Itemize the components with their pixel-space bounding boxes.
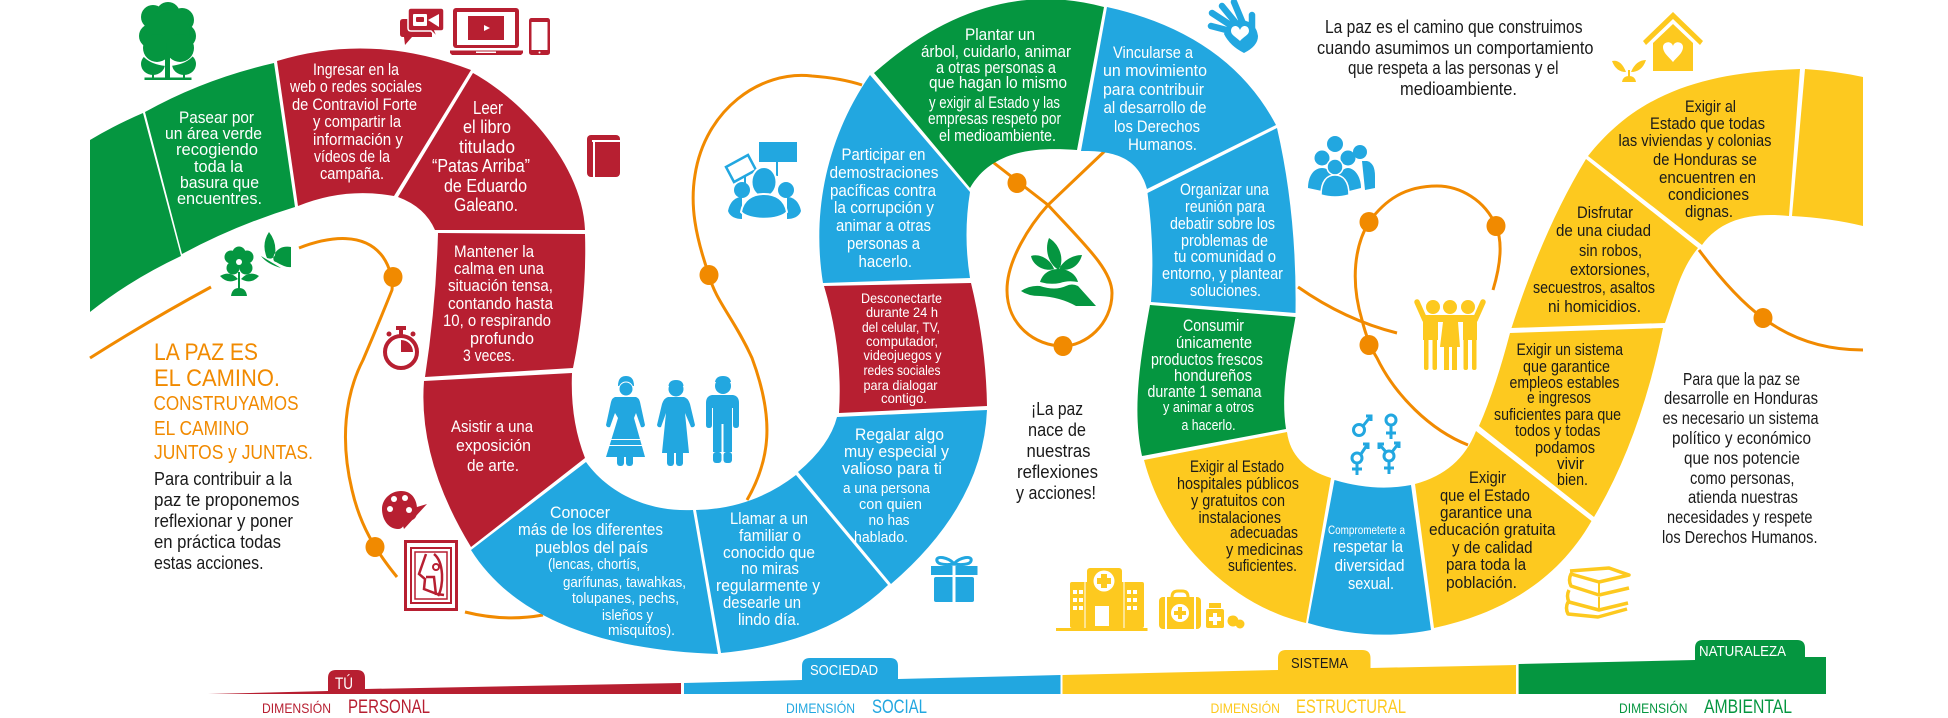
icon: tree (137, 2, 199, 80)
text block: la paz es el camino (1317, 17, 1594, 99)
panel: pasear: encuentres. (177, 190, 262, 208)
panel: exigir hospitales: hospitales públicos (1177, 475, 1299, 493)
label: dimensión estructural: DIMENSIÓN (1210, 700, 1280, 716)
panel: mantener: situación tensa, (448, 277, 553, 295)
title (154, 339, 313, 464)
panel: ingresar: y compartir la (313, 113, 402, 131)
panel: vincularse: Humanos. (1128, 136, 1197, 154)
panel: exigir viviendas: condiciones (1668, 186, 1749, 204)
bar: estructural: SISTEMA (1291, 655, 1348, 672)
panel: conocer: más de los diferentes (518, 521, 663, 539)
panel: pasear: toda la (194, 158, 244, 176)
panel: disfrutar: de una ciudad (1556, 222, 1651, 240)
text block: intro: Para contribuir a la (154, 469, 293, 489)
label: dimensión ambiental (1619, 697, 1792, 718)
panel: regalar: hablado. (854, 529, 908, 546)
panel: exigir sistema de empleo: podamos (1535, 439, 1595, 457)
panel: consumir: productos frescos (1151, 351, 1263, 369)
text block: intro: en práctica todas (154, 532, 281, 552)
text block: intro: estas acciones. (154, 553, 264, 573)
panel: conocer (471, 462, 718, 654)
text block: intro (154, 469, 300, 573)
panel: consumir: y animar a otros (1163, 399, 1254, 416)
panel: organizar (1148, 128, 1296, 313)
text block: para que la paz: es necesario un sistema (1662, 408, 1819, 428)
panel: ingresar: vídeos de la (314, 148, 391, 166)
bar: ambiental (1519, 640, 1826, 694)
panel: plantar: árbol, cuidarlo, animar (921, 43, 1071, 61)
label: dimensión social: SOCIAL (872, 697, 927, 718)
panel: exigir sistema de empleo: suficientes para que (1494, 406, 1621, 424)
label: dimensión personal: PERSONAL (348, 697, 430, 718)
text block: para que la paz: desarrolle en Honduras (1664, 388, 1818, 408)
panel: participar (819, 75, 970, 283)
panel: disfrutar (1512, 159, 1698, 328)
panel: plantar: y exigir al Estado y las (929, 94, 1060, 112)
text block: la paz es el camino: que respeta a las personas y el (1348, 58, 1558, 78)
panel: disfrutar: extorsiones, (1570, 261, 1650, 279)
icon: phone (529, 18, 550, 55)
panel: exigir viviendas: encuentren en (1659, 169, 1756, 187)
panel: asistir: Asistir a una (451, 418, 534, 436)
panel: disfrutar: ni homicidios. (1548, 298, 1641, 316)
panel: disfrutar: secuestros, asaltos (1533, 279, 1655, 297)
icon: gender symbols (1352, 415, 1399, 475)
panel: organizar: soluciones. (1190, 282, 1261, 300)
panel: exigir sistema de empleo: Exigir un sistema (1516, 341, 1624, 359)
label: dimensión estructural (1210, 697, 1406, 718)
panel: asistir (423, 373, 585, 547)
icon: woman in dress (606, 376, 645, 466)
panel: mantener: Mantener la (454, 243, 535, 261)
orange path line: left section (90, 239, 543, 618)
text block: para que la paz: Para que la paz se (1683, 369, 1800, 389)
panel: organizar: problemas de (1181, 232, 1268, 250)
panel: exigir sistema de empleo: vivir (1557, 455, 1584, 473)
icon: house with heart (1643, 12, 1703, 71)
panel: disfrutar: Disfrutar (1577, 204, 1633, 222)
panel: exigir educación: educación gratuita (1429, 521, 1556, 539)
panel: desconectarte: para dialogar (864, 377, 938, 393)
orange path line: protest loop (693, 75, 862, 500)
panel: llamar: Llamar a un (730, 510, 808, 528)
panel: exigir viviendas: las viviendas y colonias (1618, 132, 1772, 150)
icon: pill bottle (1206, 603, 1224, 628)
panel: exigir educación (1415, 431, 1592, 628)
text block: la paz nace: nuestras (1026, 441, 1090, 461)
panel: comprometerte: respetar la (1333, 538, 1404, 556)
panel: exigir viviendas: Estado que todas (1650, 115, 1765, 133)
panel: participar: demostraciones (830, 164, 938, 182)
icon: video chat (400, 8, 444, 45)
icon: flower (220, 246, 259, 296)
text block: la paz es el camino: La paz es el camino que construimos (1325, 17, 1582, 37)
panel: vincularse: un movimiento (1103, 62, 1207, 80)
panel: regalar: con quien (859, 496, 922, 513)
text block: para que la paz: necesidades y respete (1667, 507, 1812, 527)
panel: leer: el libro (463, 117, 511, 137)
panel: llamar: lindo día. (738, 611, 800, 629)
icon: framed painting (406, 542, 456, 610)
panel: desconectarte: Desconectarte (861, 290, 942, 306)
panel: pasear: recogiendo (176, 141, 258, 159)
panel: comprometerte (1308, 480, 1431, 635)
text block: para que la paz: como personas, (1690, 468, 1794, 488)
panel: plantar: el medioambiente. (939, 127, 1056, 145)
panel: consumir: únicamente (1176, 334, 1252, 352)
panel: exigir educación: Exigir (1469, 469, 1506, 487)
panel: desconectarte: contigo. (881, 390, 927, 406)
panel: regalar: a una persona (843, 480, 931, 497)
title: CONSTRUYAMOS (154, 393, 298, 415)
panel: vincularse: al desarrollo de (1104, 99, 1206, 117)
icon: family (1417, 300, 1483, 370)
panel: exigir educación: garantice una (1440, 504, 1533, 522)
panel: desconectarte (824, 283, 987, 413)
panel: exigir hospitales (1144, 432, 1331, 623)
panel: pasear: un área verde (165, 125, 262, 143)
text block: intro: reflexionar y poner (154, 511, 293, 531)
bar: estructural (1062, 650, 1516, 694)
panel: consumir: hondureños (1174, 367, 1252, 385)
panel: conocer: misquitos). (608, 622, 675, 639)
text block: para que la paz (1662, 369, 1819, 547)
title: LA PAZ ES (154, 339, 258, 366)
panel: participar: la corrupción y (834, 199, 935, 217)
title: EL CAMINO. (154, 365, 280, 392)
panel: regalar: no has (868, 512, 910, 529)
panel: pasear (145, 63, 295, 254)
panel: comprometerte: sexual. (1348, 575, 1394, 593)
panel: exigir viviendas (1588, 69, 1800, 245)
title: EL CAMINO (154, 418, 249, 440)
icon: laptop (450, 8, 523, 55)
icon: butterfly (261, 232, 291, 268)
panel: desconectarte: redes sociales (864, 362, 940, 378)
panel: ingresar: de Contraviol Forte (292, 96, 417, 114)
text block: la paz es el camino: medioambiente. (1400, 79, 1517, 99)
panel: mantener: 10, o respirando (443, 312, 551, 330)
text block: la paz nace: ¡La paz (1031, 399, 1083, 419)
bar: social: SOCIEDAD (810, 662, 878, 679)
panel: vincularse: los Derechos (1114, 118, 1200, 136)
panel: ingresar: web o redes sociales (289, 78, 422, 96)
panel: desconectarte: durante 24 h (866, 304, 938, 320)
panel: exigir educación: población. (1446, 574, 1517, 592)
panel: conocer: (lencas, chortís, (548, 556, 640, 573)
icon: stopwatch (385, 326, 417, 368)
panel: comprometerte: diversidad (1334, 557, 1404, 575)
text block: para que la paz: atienda nuestras (1688, 487, 1798, 507)
icon: palette (382, 491, 427, 529)
panel: ingresar: campaña. (320, 165, 384, 183)
text block: la paz nace: reflexiones (1017, 462, 1098, 482)
panel: exigir sistema de empleo: empleos estables (1510, 374, 1620, 392)
panel: llamar: no miras (741, 560, 799, 578)
panel: pasear: Pasear por (179, 109, 254, 127)
panel: exigir viviendas: Exigir al (1685, 98, 1736, 116)
panel: regalar: muy especial y (844, 443, 950, 461)
icon: books (1566, 568, 1629, 617)
bar: personal (208, 670, 681, 694)
panel: leer: “Patas Arriba” (432, 156, 530, 176)
text block: la paz nace: nace de (1028, 420, 1086, 440)
label: dimensión personal: DIMENSIÓN (262, 700, 331, 716)
panel: desconectarte: computador, (866, 333, 938, 349)
label: dimensión personal (262, 697, 430, 718)
panel: desconectarte: del celular, TV, (862, 319, 940, 335)
bar: social (684, 658, 1060, 694)
panel: mantener: 3 veces. (463, 347, 515, 365)
text block: intro: paz te proponemos (154, 490, 300, 510)
icon: first aid kit (1159, 591, 1201, 629)
panel: exigir educación: para toda la (1446, 556, 1527, 574)
icon: gift box (931, 557, 978, 602)
icon: protest group (726, 142, 801, 219)
panel: regalar: valioso para ti (842, 460, 942, 478)
panel: mantener: profundo (470, 330, 534, 348)
panel: participar: personas a (847, 235, 921, 253)
panel: vincularse: Vincularse a (1113, 44, 1194, 62)
panel: conocer: Conocer (550, 504, 610, 522)
panel: mantener: contando hasta (448, 295, 554, 313)
icon: pills (1228, 616, 1244, 628)
panel: plantar: Plantar un (965, 26, 1035, 44)
panel: leer (398, 73, 585, 230)
panel: organizar: entorno, y plantear (1162, 265, 1283, 283)
panel: disfrutar: sin robos, (1579, 242, 1642, 260)
panel: green start segment (90, 113, 181, 312)
panel: consumir: durante 1 semana (1148, 383, 1262, 401)
panel: exigir sistema de empleo (1479, 328, 1663, 517)
text block: para que la paz: que nos potencie (1684, 448, 1800, 468)
panel: exigir hospitales: suficientes. (1228, 557, 1297, 575)
text block: para que la paz: los Derechos Humanos. (1662, 527, 1818, 547)
panel: exigir sistema de empleo: que garantice (1523, 358, 1610, 376)
title: JUNTOS y JUNTAS. (154, 442, 313, 464)
panel: mantener (425, 233, 585, 377)
icon: plant in hand (1021, 238, 1096, 306)
panel: conocer: pueblos del país (535, 539, 648, 557)
panel: pasear: basura que (180, 174, 259, 192)
icon: hand with heart (1211, 2, 1258, 53)
panel: exigir hospitales: Exigir al Estado (1190, 458, 1284, 476)
panel: ingresar (277, 48, 471, 206)
panel: exigir educación: y de calidad (1452, 539, 1532, 557)
panel: llamar: regularmente y (716, 577, 821, 595)
panel: ingresar: información y (313, 131, 404, 149)
panel: exigir sistema de empleo: bien. (1557, 471, 1588, 489)
panel: mantener: calma en una (454, 260, 545, 278)
bar: personal: TÚ (335, 674, 353, 693)
panel: conocer: tolupanes, pechs, (572, 590, 679, 607)
panel: exigir viviendas: de Honduras se (1653, 151, 1757, 169)
panel: participar: Participar en (842, 146, 926, 164)
label: dimensión ambiental: DIMENSIÓN (1619, 700, 1688, 716)
panel: exigir sistema de empleo: todos y todas (1515, 422, 1600, 440)
panel: exigir viviendas: dignas. (1685, 203, 1733, 221)
orange path line: centre loop (985, 148, 1112, 356)
panel: exigir sistema de empleo: e ingresos (1527, 389, 1591, 407)
panel: asistir: exposición (456, 437, 531, 455)
panel: vincularse: para contribuir (1103, 81, 1204, 99)
panel: desconectarte: videojuegos y (864, 347, 942, 363)
text block: la paz nace: y acciones! (1016, 483, 1096, 503)
panel: exigir hospitales: y medicinas (1226, 541, 1303, 559)
panel: ingresar: Ingresar en la (313, 61, 400, 79)
panel: llamar: conocido que (723, 544, 815, 562)
panel: conocer: garífunas, tawahkas, (563, 574, 686, 591)
orange path line: right loop (1298, 186, 1506, 445)
icon: woman in coat (657, 380, 695, 466)
panel: organizar: debatir sobre los (1170, 215, 1275, 233)
text block: para que la paz: político y económico (1672, 428, 1811, 448)
icon: man (706, 376, 739, 463)
panel: consumir: a hacerlo. (1182, 417, 1236, 434)
panel: organizar: reunión para (1185, 198, 1266, 216)
panel: llamar (696, 475, 888, 653)
panel: leer: de Eduardo (444, 176, 527, 196)
orange path line: far right (1699, 250, 1863, 350)
panel: vincularse (1081, 7, 1276, 189)
panel: llamar: desearle un (723, 594, 801, 612)
panel: comprometerte: Comprometerte a (1328, 525, 1406, 537)
icon: people group (1308, 136, 1375, 197)
label: dimensión estructural: ESTRUCTURAL (1296, 697, 1406, 718)
panel: plantar: a otras personas a (936, 59, 1057, 77)
panel: consumir (1137, 305, 1296, 456)
panel: consumir: Consumir (1183, 317, 1244, 335)
bar: ambiental: NATURALEZA (1699, 643, 1786, 660)
panel: regalar (798, 410, 987, 584)
panel: exigir hospitales: adecuadas (1230, 524, 1298, 542)
panel: llamar: familiar o (739, 527, 801, 545)
panel: conocer: isleños y (602, 607, 653, 624)
panel: plantar (874, 0, 1104, 188)
text block: la paz es el camino: cuando asumimos un comportamiento (1317, 38, 1594, 58)
panel: leer: Galeano. (454, 195, 518, 215)
label: dimensión social: DIMENSIÓN (786, 700, 855, 716)
icon: red book (587, 135, 620, 177)
panel: plantar: que hagan lo mismo (929, 74, 1067, 92)
panel: yellow end segment (1792, 69, 1863, 226)
panel: participar: hacerlo. (858, 253, 912, 271)
panel: exigir hospitales: y gratuitos con (1191, 492, 1285, 510)
icon: sprout (1612, 60, 1646, 82)
panel: plantar: empresas respeto por (928, 110, 1061, 128)
label: dimensión ambiental: AMBIENTAL (1704, 697, 1792, 718)
panel: exigir hospitales: instalaciones (1198, 509, 1281, 527)
panel: leer: Leer (473, 98, 503, 118)
icon: hospital (1056, 568, 1148, 631)
panel: organizar: Organizar una (1180, 181, 1270, 199)
panel: exigir educación: que el Estado (1440, 487, 1530, 505)
panel: participar: pacíficas contra (830, 182, 937, 200)
panel: organizar: tu comunidad o (1174, 248, 1276, 266)
panel: leer: titulado (459, 137, 515, 157)
text block: la paz nace (1016, 399, 1098, 503)
panel: asistir: de arte. (467, 457, 519, 475)
panel: regalar: Regalar algo (855, 426, 944, 444)
panel: participar: animar a otras (836, 217, 931, 235)
label: dimensión social (786, 697, 927, 718)
